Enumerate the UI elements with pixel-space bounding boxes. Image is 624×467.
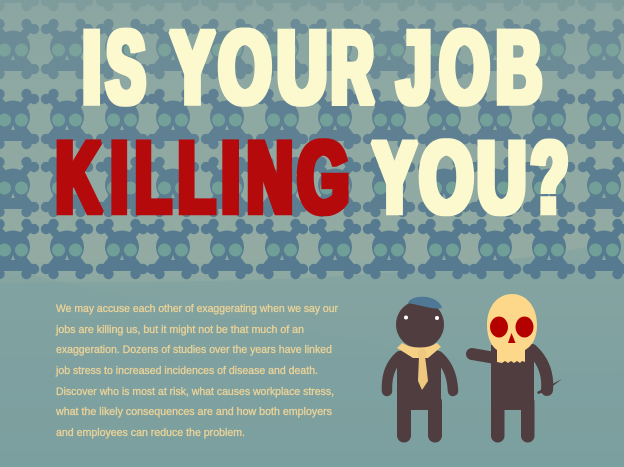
character: office worker (387, 297, 453, 442)
title word: YOU?: U (477, 120, 526, 234)
skull man body (472, 345, 547, 442)
title line 1: O (219, 10, 271, 126)
skull and crossbones pattern (0, 0, 624, 279)
title line 1: Y (171, 10, 214, 126)
hair (408, 297, 442, 309)
title line 1: S (106, 10, 145, 126)
title word: KILLING: K (56, 120, 101, 234)
title word: KILLING: G (298, 120, 349, 234)
title word: KILLING: I (111, 120, 128, 234)
skull head (487, 294, 537, 363)
title line 1: O (440, 10, 489, 126)
title word: KILLING: L (136, 120, 171, 234)
title word: KILLING: I (222, 120, 240, 234)
skull eyes and nose (490, 316, 508, 338)
scythe blade (537, 379, 562, 394)
worker body (387, 346, 453, 442)
intro paragraph: exaggeration. Dozens of studies over the years have linked (56, 344, 332, 356)
intro paragraph: what the likely consequences are and how both employers (55, 406, 332, 418)
character: skull-faced man (472, 294, 562, 442)
intro paragraph: and employees can reduce the problem. (56, 427, 245, 439)
intro paragraph: jobs are killing us, but it might not be that much of an (55, 324, 304, 336)
title line 1: J (397, 10, 431, 126)
title line 1: R (331, 10, 373, 126)
title word: YOU?: Y (373, 120, 416, 234)
title line 1: B (496, 10, 542, 126)
collar and tie (397, 343, 441, 358)
title word: YOU?: O (420, 120, 473, 234)
intro paragraph: We may accuse each other of exaggerating when we say our (56, 303, 338, 315)
title word: KILLING: N (247, 120, 293, 234)
intro paragraph: Discover who is most at risk, what causes workplace stress, (56, 386, 334, 398)
title (56, 10, 568, 234)
title line 1 (83, 10, 542, 126)
title word: YOU?: ? (531, 120, 568, 234)
title word: KILLING: L (178, 120, 215, 234)
title line 1: I (83, 10, 101, 126)
title line 1: U (277, 10, 327, 126)
title word: KILLING (56, 120, 349, 234)
title word: YOU? (373, 120, 568, 234)
intro paragraph (55, 303, 338, 439)
worker head (396, 300, 444, 348)
intro paragraph: job stress to increased incidences of disease and death. (55, 365, 318, 377)
